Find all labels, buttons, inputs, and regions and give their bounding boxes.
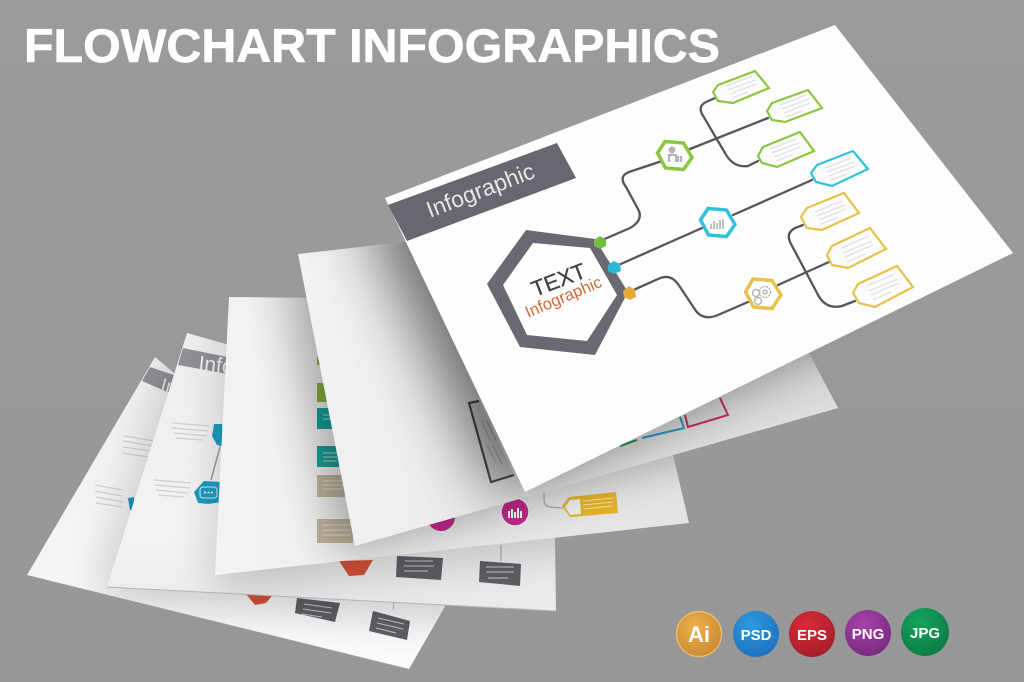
blue outlined box (642, 417, 684, 438)
shadow on third page (264, 298, 680, 562)
magenta circle one (426, 502, 456, 532)
header band on back page: In (159, 374, 178, 398)
red hexagon (339, 560, 373, 576)
tag: green top (713, 71, 769, 103)
header band on second page: Info (197, 352, 235, 379)
shadow on back page (90, 359, 446, 636)
connector stub (393, 602, 394, 610)
sheet: fourth page, blank with outlined notes (298, 220, 838, 546)
magenta circle two with bars (501, 498, 529, 526)
title: FLOWCHART INFOGRAPHICS (24, 19, 720, 72)
shadow on second page (198, 340, 556, 598)
badge: PNG: PNG (852, 626, 884, 643)
sheet: third page with colour blocks (215, 297, 689, 575)
yellow tag (562, 492, 618, 517)
connector line (211, 447, 220, 480)
dark outlined box (469, 401, 514, 482)
badge: JPG: JPG (910, 625, 940, 642)
pink outlined box (685, 398, 728, 427)
text lines on back page (95, 436, 154, 507)
header text: Infographic (422, 158, 538, 223)
connector dot blue (608, 261, 621, 274)
red hexagon on back page (246, 594, 272, 605)
header band on second page (178, 348, 235, 379)
icon: green hexagon people (658, 142, 692, 170)
badge: PNG (845, 610, 891, 656)
colour block rows (317, 357, 353, 543)
connector (544, 493, 563, 508)
sheet: back page with hexagons and dark notes (27, 357, 447, 669)
shadow on fourth page (333, 242, 826, 514)
dark note two (369, 611, 410, 640)
connector (500, 545, 502, 561)
dark note four (479, 561, 521, 586)
tag: yellow bottom (853, 266, 913, 307)
badge: PSD: PSD (741, 627, 772, 644)
text lines on second page (154, 423, 209, 497)
icon: blue hexagon chart (700, 208, 735, 236)
tag: blue (811, 151, 868, 186)
teal hexagon lower with chat icon (194, 481, 222, 504)
teal hexagon on back page (128, 497, 134, 512)
tag: yellow top (801, 193, 859, 230)
badge: JPG (901, 608, 949, 656)
teal hexagon upper (212, 424, 224, 447)
panel: front page (385, 25, 1013, 492)
connector dot orange (623, 286, 636, 300)
badge: EPS: EPS (797, 627, 827, 644)
header band (388, 143, 576, 241)
badge: Ai (676, 612, 722, 656)
header band on back page (142, 367, 180, 398)
dark note three (396, 556, 443, 580)
hexagon title: TEXT (528, 258, 589, 302)
green outline fragment (620, 440, 637, 446)
connector lines (600, 98, 855, 317)
hexagon subtitle: Infographic (523, 273, 605, 322)
format badges (676, 608, 949, 657)
icon: yellow hexagon gears (746, 279, 781, 308)
connector dot green (594, 236, 606, 249)
large hexagon (487, 230, 628, 355)
tag: green bottom (758, 132, 814, 167)
sheet: second page with teal hexagons (107, 333, 556, 611)
badge: PSD (733, 611, 779, 657)
badge: EPS (789, 611, 835, 657)
badge: Ai: Ai (688, 622, 710, 647)
tag: yellow middle (827, 228, 886, 268)
dark note one (295, 598, 340, 622)
tag: green middle (767, 90, 822, 122)
